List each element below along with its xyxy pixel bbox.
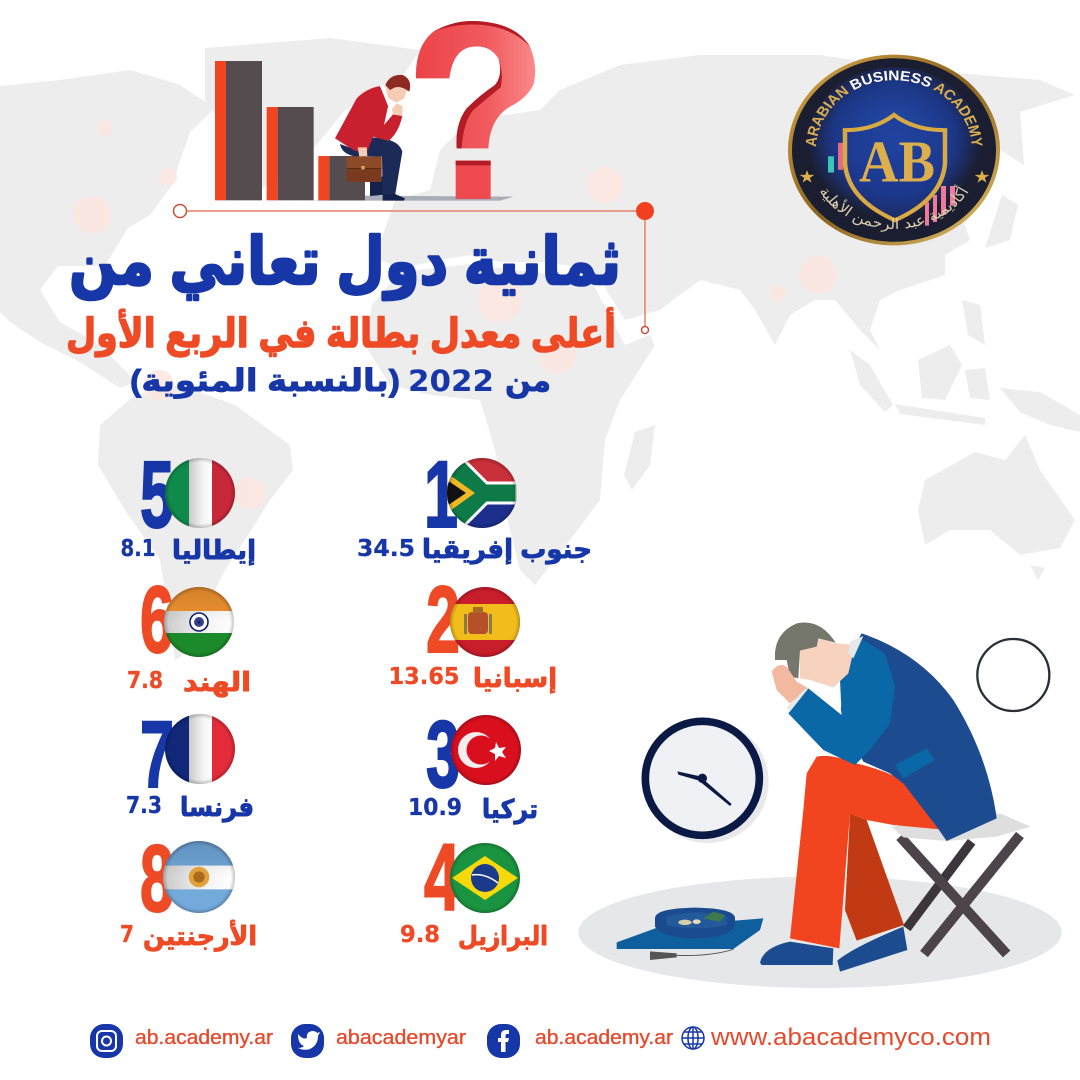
title: line 3: (بالنسبة المئوية) — [130, 363, 400, 399]
label: الأرجنتين — [143, 920, 257, 952]
instagram — [90, 1024, 273, 1058]
flag: Spain — [450, 587, 520, 657]
facebook — [487, 1024, 673, 1058]
rank 3: 3 — [426, 702, 460, 808]
stars — [798, 167, 991, 187]
background: world map — [0, 38, 1080, 660]
country 3: Turkey — [410, 715, 537, 825]
country 2: Spain — [390, 585, 556, 694]
value: 7.3 — [126, 793, 162, 819]
value: 13.65 — [388, 664, 460, 690]
country 5: Italy — [122, 458, 254, 566]
rank 2: 2 — [426, 567, 460, 673]
label: إيطاليا — [172, 535, 256, 566]
flag: Argentina — [163, 841, 235, 913]
title: line 3: من — [505, 363, 551, 399]
country 1: South Africa — [358, 458, 590, 565]
value: 10.9 — [408, 795, 462, 821]
background: pale red map markers — [73, 120, 837, 509]
briefcase — [347, 157, 382, 182]
label: فرنسا — [180, 792, 254, 823]
candlesticks — [828, 143, 955, 226]
website: www.abacademyco.com — [710, 1024, 991, 1051]
rank 8: 8 — [140, 826, 174, 932]
title: line 3: 2022 — [408, 364, 494, 398]
stars: ★ — [973, 167, 991, 187]
value: 9.8 — [400, 922, 440, 948]
facebook: ab.academy.ar — [535, 1027, 673, 1049]
title: line 3 — [130, 363, 551, 399]
illustration: bars, thinking man and question mark — [215, 21, 535, 201]
seated man — [335, 75, 410, 201]
floor ellipse — [578, 877, 1062, 988]
label: البرازيل — [458, 921, 548, 952]
instagram: ab.academy.ar — [135, 1027, 273, 1049]
rank 5: 5 — [140, 442, 174, 548]
flag: South Africa — [447, 458, 517, 528]
label: الهند — [183, 667, 251, 698]
flag: Turkey — [451, 715, 521, 785]
label: جنوب إفريقيا — [422, 534, 592, 565]
bar chart — [215, 61, 365, 200]
twitter — [291, 1024, 466, 1058]
ground shadow — [313, 196, 513, 201]
country 4: Brazil — [401, 843, 546, 952]
shield — [845, 115, 945, 220]
country 7: France — [127, 714, 252, 823]
logo: Arabian Business Academy — [788, 54, 1000, 246]
flag: India — [164, 587, 234, 657]
flag: Italy — [165, 458, 235, 528]
value: 8.1 — [120, 536, 156, 562]
rank 1: 1 — [424, 442, 458, 548]
value: 7 — [120, 922, 134, 948]
decorative connector line — [174, 202, 654, 334]
country 6: India — [128, 585, 250, 698]
title: line 1: ثمانية دول تعاني من — [69, 224, 621, 301]
AB letters: AB — [859, 129, 935, 195]
footer: social links — [90, 1024, 991, 1058]
flag: France — [165, 714, 235, 784]
label: تركيا — [482, 794, 538, 825]
twitter: abacademyar — [336, 1027, 466, 1049]
ring outline — [977, 639, 1049, 711]
stool — [892, 813, 1031, 954]
clock — [645, 720, 769, 843]
illustration: stressed man with clock and stool — [578, 622, 1062, 988]
rank 7: 7 — [140, 702, 174, 808]
question mark — [416, 21, 535, 199]
label: إسبانيا — [473, 663, 557, 694]
flag: Brazil — [450, 843, 520, 913]
rank 4: 4 — [424, 825, 460, 931]
title: line 2: أعلى معدل بطالة في الربع الأول — [66, 307, 616, 357]
value: 34.5 — [357, 536, 415, 562]
logo badge — [788, 55, 1000, 245]
coin bowl on mat — [617, 908, 763, 960]
ring Arabic text: أكاديمية عبد الرحمن الأهلية — [820, 184, 968, 232]
value: 7.8 — [127, 668, 163, 694]
man — [760, 622, 997, 972]
rank 6: 6 — [140, 567, 174, 673]
country 8: Argentina — [121, 841, 256, 952]
stars: ★ — [798, 167, 816, 187]
ring text: ARABIAN BUSINESS ACADEMY — [806, 70, 983, 147]
